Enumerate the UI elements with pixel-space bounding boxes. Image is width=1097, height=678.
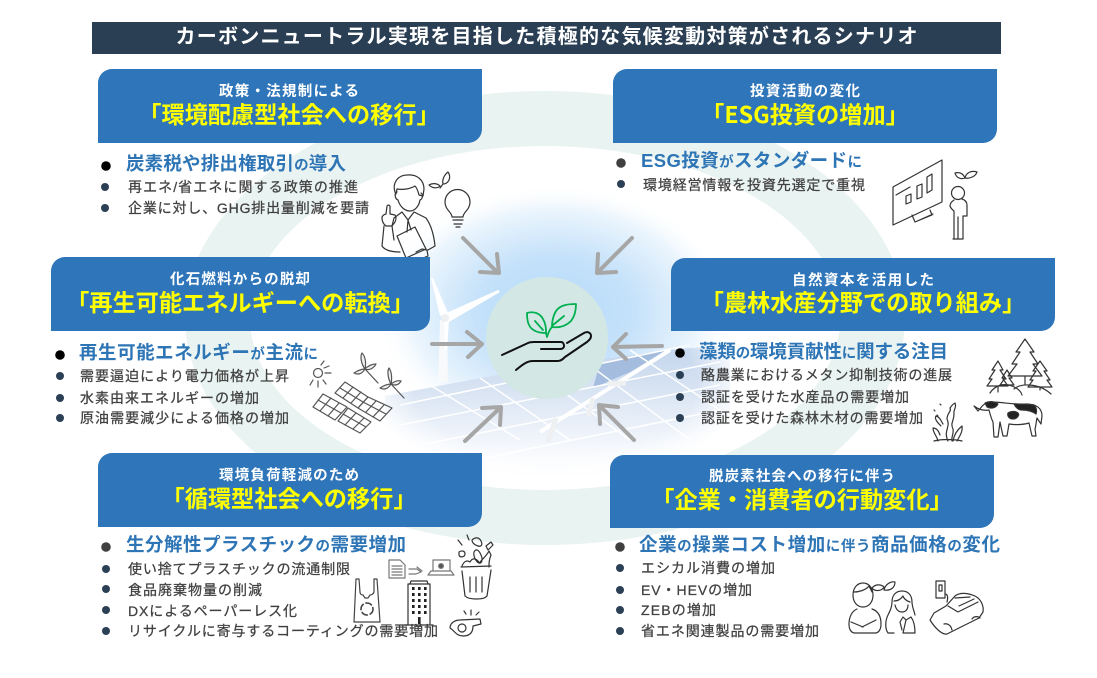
arrows (432, 238, 662, 441)
photo: solar panels (385, 344, 730, 452)
icon: trash can (458, 535, 493, 599)
bullets: consumers: 企業の操業コスト増加に伴う商品価格の変化 (639, 534, 1000, 555)
icon: document to laptop (389, 560, 454, 578)
title bar: カーボンニュートラル実現を目指した積極的な気候変動対策がされるシナリオ (176, 24, 918, 48)
bullets: circular: リサイクルに寄与するコーティングの需要増加 (128, 623, 438, 639)
bullets: consumers: ZEBの増加 (641, 602, 716, 618)
header: policy (98, 69, 482, 143)
bullets: renewable: 再生可能エネルギーが主流に (79, 342, 318, 363)
bullets: nature (675, 341, 952, 426)
bullets: nature: 認証を受けた水産品の需要増加 (701, 389, 909, 405)
icon: whistle (450, 610, 481, 636)
header: circular: 「循環型社会への移行」 (161, 486, 417, 512)
bullets: renewable: 水素由来エネルギーの増加 (80, 390, 259, 406)
bullets: renewable: 原油需要減少による価格の増加 (80, 410, 289, 426)
arrow: left (432, 332, 482, 357)
icon: businessman, leaf and bulb (382, 172, 470, 258)
icon: office building (405, 581, 433, 625)
central circle (486, 277, 608, 399)
background ring (185, 91, 905, 545)
arrow: top left (463, 238, 499, 273)
panel: ESG (613, 69, 997, 239)
bullets: circular (101, 534, 438, 639)
bullets: policy: 企業に対し、GHG排出量削減を要請 (128, 200, 369, 216)
central glow (375, 184, 735, 440)
bullets: renewable: 需要逼迫により電力価格が上昇 (80, 368, 289, 384)
bullets: policy: 再エネ/省エネに関する政策の推進 (128, 179, 358, 195)
header: ESG (613, 69, 997, 143)
panel: consumers (610, 455, 1000, 639)
header: circular (98, 453, 482, 527)
icon: sprout in hand (502, 304, 591, 370)
panel: circular (98, 453, 493, 639)
header: policy: 政策・法規制による (219, 82, 359, 100)
header: ESG: 「ESG投資の増加」 (701, 96, 909, 130)
header: renewable: 化石燃料からの脱却 (170, 270, 310, 288)
photo: wind turbine (431, 278, 500, 382)
icon: solar panels and wind turbines (310, 353, 404, 433)
arrow: right (613, 334, 662, 359)
bullets: nature: 酪農業におけるメタン抑制技術の進展 (701, 367, 952, 383)
header: circular: 環境負荷軽減のため (219, 466, 359, 484)
header: nature: 自然資本を活用した (792, 271, 934, 289)
header: consumers: 「企業・消費者の行動変化」 (651, 487, 953, 513)
header: consumers: 脱炭素社会への移行に伴う (709, 467, 895, 485)
icon: monitor and person (893, 160, 977, 239)
arrow: bottom right (599, 405, 634, 440)
bullets: ESG: ESG投資がスタンダードに (641, 150, 862, 171)
bullets: circular: 使い捨てプラスチックの流通制限 (128, 561, 350, 577)
bullets: circular: 食品廃棄物量の削減 (128, 582, 262, 598)
bullets: ESG: 環境経営情報を投資先選定で重視 (643, 177, 865, 193)
icon: EV charger and car (930, 581, 983, 634)
bullets: consumers (615, 534, 1000, 639)
bullets: nature: 認証を受けた森林木材の需要増加 (701, 410, 923, 426)
bullets: policy (101, 153, 369, 216)
icon: two people with leaf (849, 582, 915, 633)
bullets: circular: 生分解性プラスチックの需要増加 (126, 534, 406, 555)
header: policy: 「環境配慮型社会への移行」 (138, 102, 440, 128)
bullets: consumers: エシカル消費の増加 (641, 560, 775, 576)
panel: policy (98, 69, 482, 258)
bullets: policy: 炭素税や排出権取引の導入 (126, 153, 346, 174)
header: renewable (51, 257, 430, 331)
header: consumers (610, 455, 994, 528)
icon: seaweed (933, 403, 962, 441)
bullets: consumers: EV・HEVの増加 (641, 582, 752, 598)
bullets: ESG (616, 150, 865, 193)
header: ESG: 投資活動の変化 (750, 82, 860, 100)
icon: cow (974, 402, 1042, 437)
icon: recycling bag (354, 579, 380, 622)
header: nature (671, 258, 1055, 331)
bullets: circular: DXによるペーパーレス化 (128, 603, 297, 619)
panel: renewable (51, 257, 430, 433)
bullets: consumers: 省エネ関連製品の需要増加 (641, 623, 819, 639)
header: nature: 「農林水産分野での取り組み」 (701, 290, 1025, 316)
bullets: renewable (55, 342, 318, 426)
arrow: top right (597, 238, 632, 273)
title bar (92, 22, 1001, 54)
bullets: nature: 藻類の環境貢献性に関する注目 (699, 341, 948, 362)
icon: trees (987, 339, 1052, 395)
panel: nature (671, 258, 1055, 441)
header: renewable: 「再生可能エネルギーへの転換」 (66, 290, 414, 316)
arrow: bottom left (465, 407, 501, 441)
